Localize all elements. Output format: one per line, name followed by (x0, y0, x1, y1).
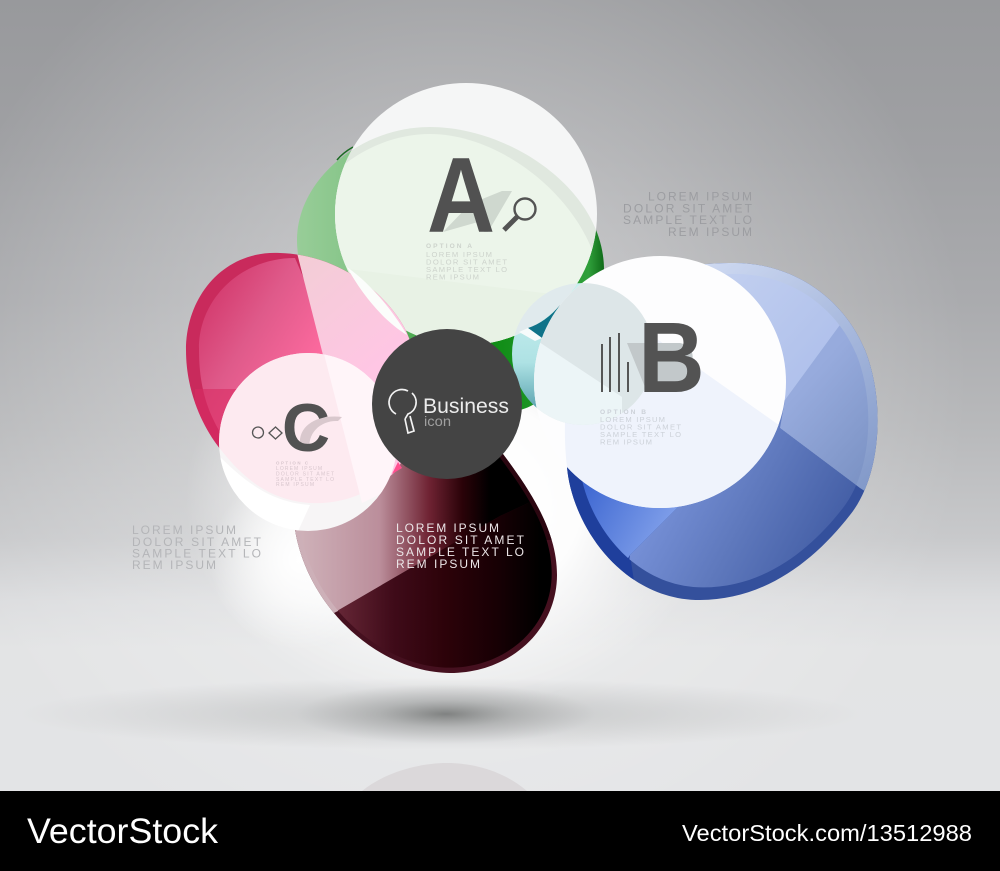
lower left caption (132, 523, 262, 572)
crimson inner highlight (199, 258, 323, 431)
icon: bars (602, 333, 628, 392)
blue upper light segment (769, 293, 840, 400)
blue middle segment (629, 400, 856, 588)
option B content (600, 302, 705, 446)
option C text: REM IPSUM (276, 482, 314, 488)
letter B: B (638, 302, 705, 414)
option C text (276, 460, 334, 488)
top right caption: REM IPSUM (668, 225, 752, 239)
maroon blob caption: REM IPSUM (396, 557, 480, 571)
lower left caption: SAMPLE TEXT LO (132, 546, 261, 560)
maroon blob caption: LOREM IPSUM (396, 521, 499, 535)
footer brand: VectorStock (27, 812, 219, 851)
dark Business circle (372, 329, 522, 479)
maroon dark segment (338, 502, 552, 668)
crimson blob (186, 252, 410, 476)
icon: circle and diamond (252, 427, 282, 439)
option A text (426, 243, 507, 282)
letter A ghost (443, 191, 512, 232)
option A text: LOREM IPSUM (426, 250, 492, 259)
letter C: C (282, 390, 330, 466)
lower left caption: LOREM IPSUM (132, 523, 236, 537)
option C text: SAMPLE TEXT LO (276, 477, 334, 483)
pale pink segment (298, 254, 410, 476)
small teal circle (512, 283, 654, 425)
option A text: SAMPLE TEXT LO (426, 265, 507, 274)
lower left caption: REM IPSUM (132, 558, 216, 572)
teal circle through B (534, 283, 647, 413)
maroon rim pale part (295, 530, 439, 613)
white crescent between pink and circle A (347, 267, 407, 335)
lower left caption: DOLOR SIT AMET (132, 535, 262, 549)
option B text: DOLOR SIT AMET (600, 422, 681, 432)
top right caption: SAMPLE TEXT LO (623, 213, 752, 227)
circle B (534, 256, 786, 508)
letter B ghost (627, 343, 693, 392)
blue blob (566, 263, 878, 600)
teal sliver (528, 305, 560, 338)
option B text: REM IPSUM (600, 438, 652, 446)
circle C (219, 353, 396, 531)
green tint inside circle A (335, 127, 596, 343)
option A text: OPTION A (426, 243, 472, 250)
circle A (335, 83, 597, 343)
letter A: A (427, 135, 495, 255)
top right caption (623, 190, 753, 239)
option B text (600, 409, 681, 446)
blue right segment (780, 326, 868, 484)
maroon rim dark part at top right (500, 454, 552, 540)
maroon pale segment (321, 458, 530, 610)
white sliver (519, 328, 542, 341)
blue rim upper (704, 263, 878, 490)
letter C ghost (300, 417, 342, 452)
floor shadow (20, 678, 860, 750)
reflection of the bottom blob (362, 763, 527, 791)
footer url: VectorStock.com/13512988 (682, 820, 972, 846)
Business label: Business (423, 395, 509, 418)
option A text: DOLOR SIT AMET (426, 258, 507, 266)
option B text: OPTION B (600, 409, 646, 416)
option B text: LOREM IPSUM (600, 415, 665, 424)
top right caption: LOREM IPSUM (648, 190, 752, 204)
blue rim lower left (567, 468, 634, 580)
green blob (297, 127, 604, 411)
maroon blob (295, 454, 557, 673)
maroon blob caption (396, 521, 525, 571)
option C text: LOREM IPSUM (276, 466, 322, 472)
option A text: REM IPSUM (426, 272, 479, 282)
top right caption: DOLOR SIT AMET (623, 202, 753, 216)
icon: business keyhole (389, 390, 416, 433)
option C text: OPTION C (276, 460, 309, 466)
icon label: icon (424, 414, 451, 429)
option C text: DOLOR SIT AMET (276, 472, 334, 478)
option A content (426, 135, 536, 282)
maroon blob caption: DOLOR SIT AMET (396, 533, 525, 547)
pink wedge under dark circle (392, 462, 402, 474)
maroon blob caption: SAMPLE TEXT LO (396, 545, 524, 559)
option B text: SAMPLE TEXT LO (600, 430, 681, 439)
footer bar (0, 791, 1000, 871)
option C content (252, 390, 342, 488)
teal circle through A (540, 284, 576, 322)
icon: magnifier (504, 198, 536, 230)
lavender part of circle B (565, 340, 778, 508)
blue lower-left segment (582, 481, 678, 558)
